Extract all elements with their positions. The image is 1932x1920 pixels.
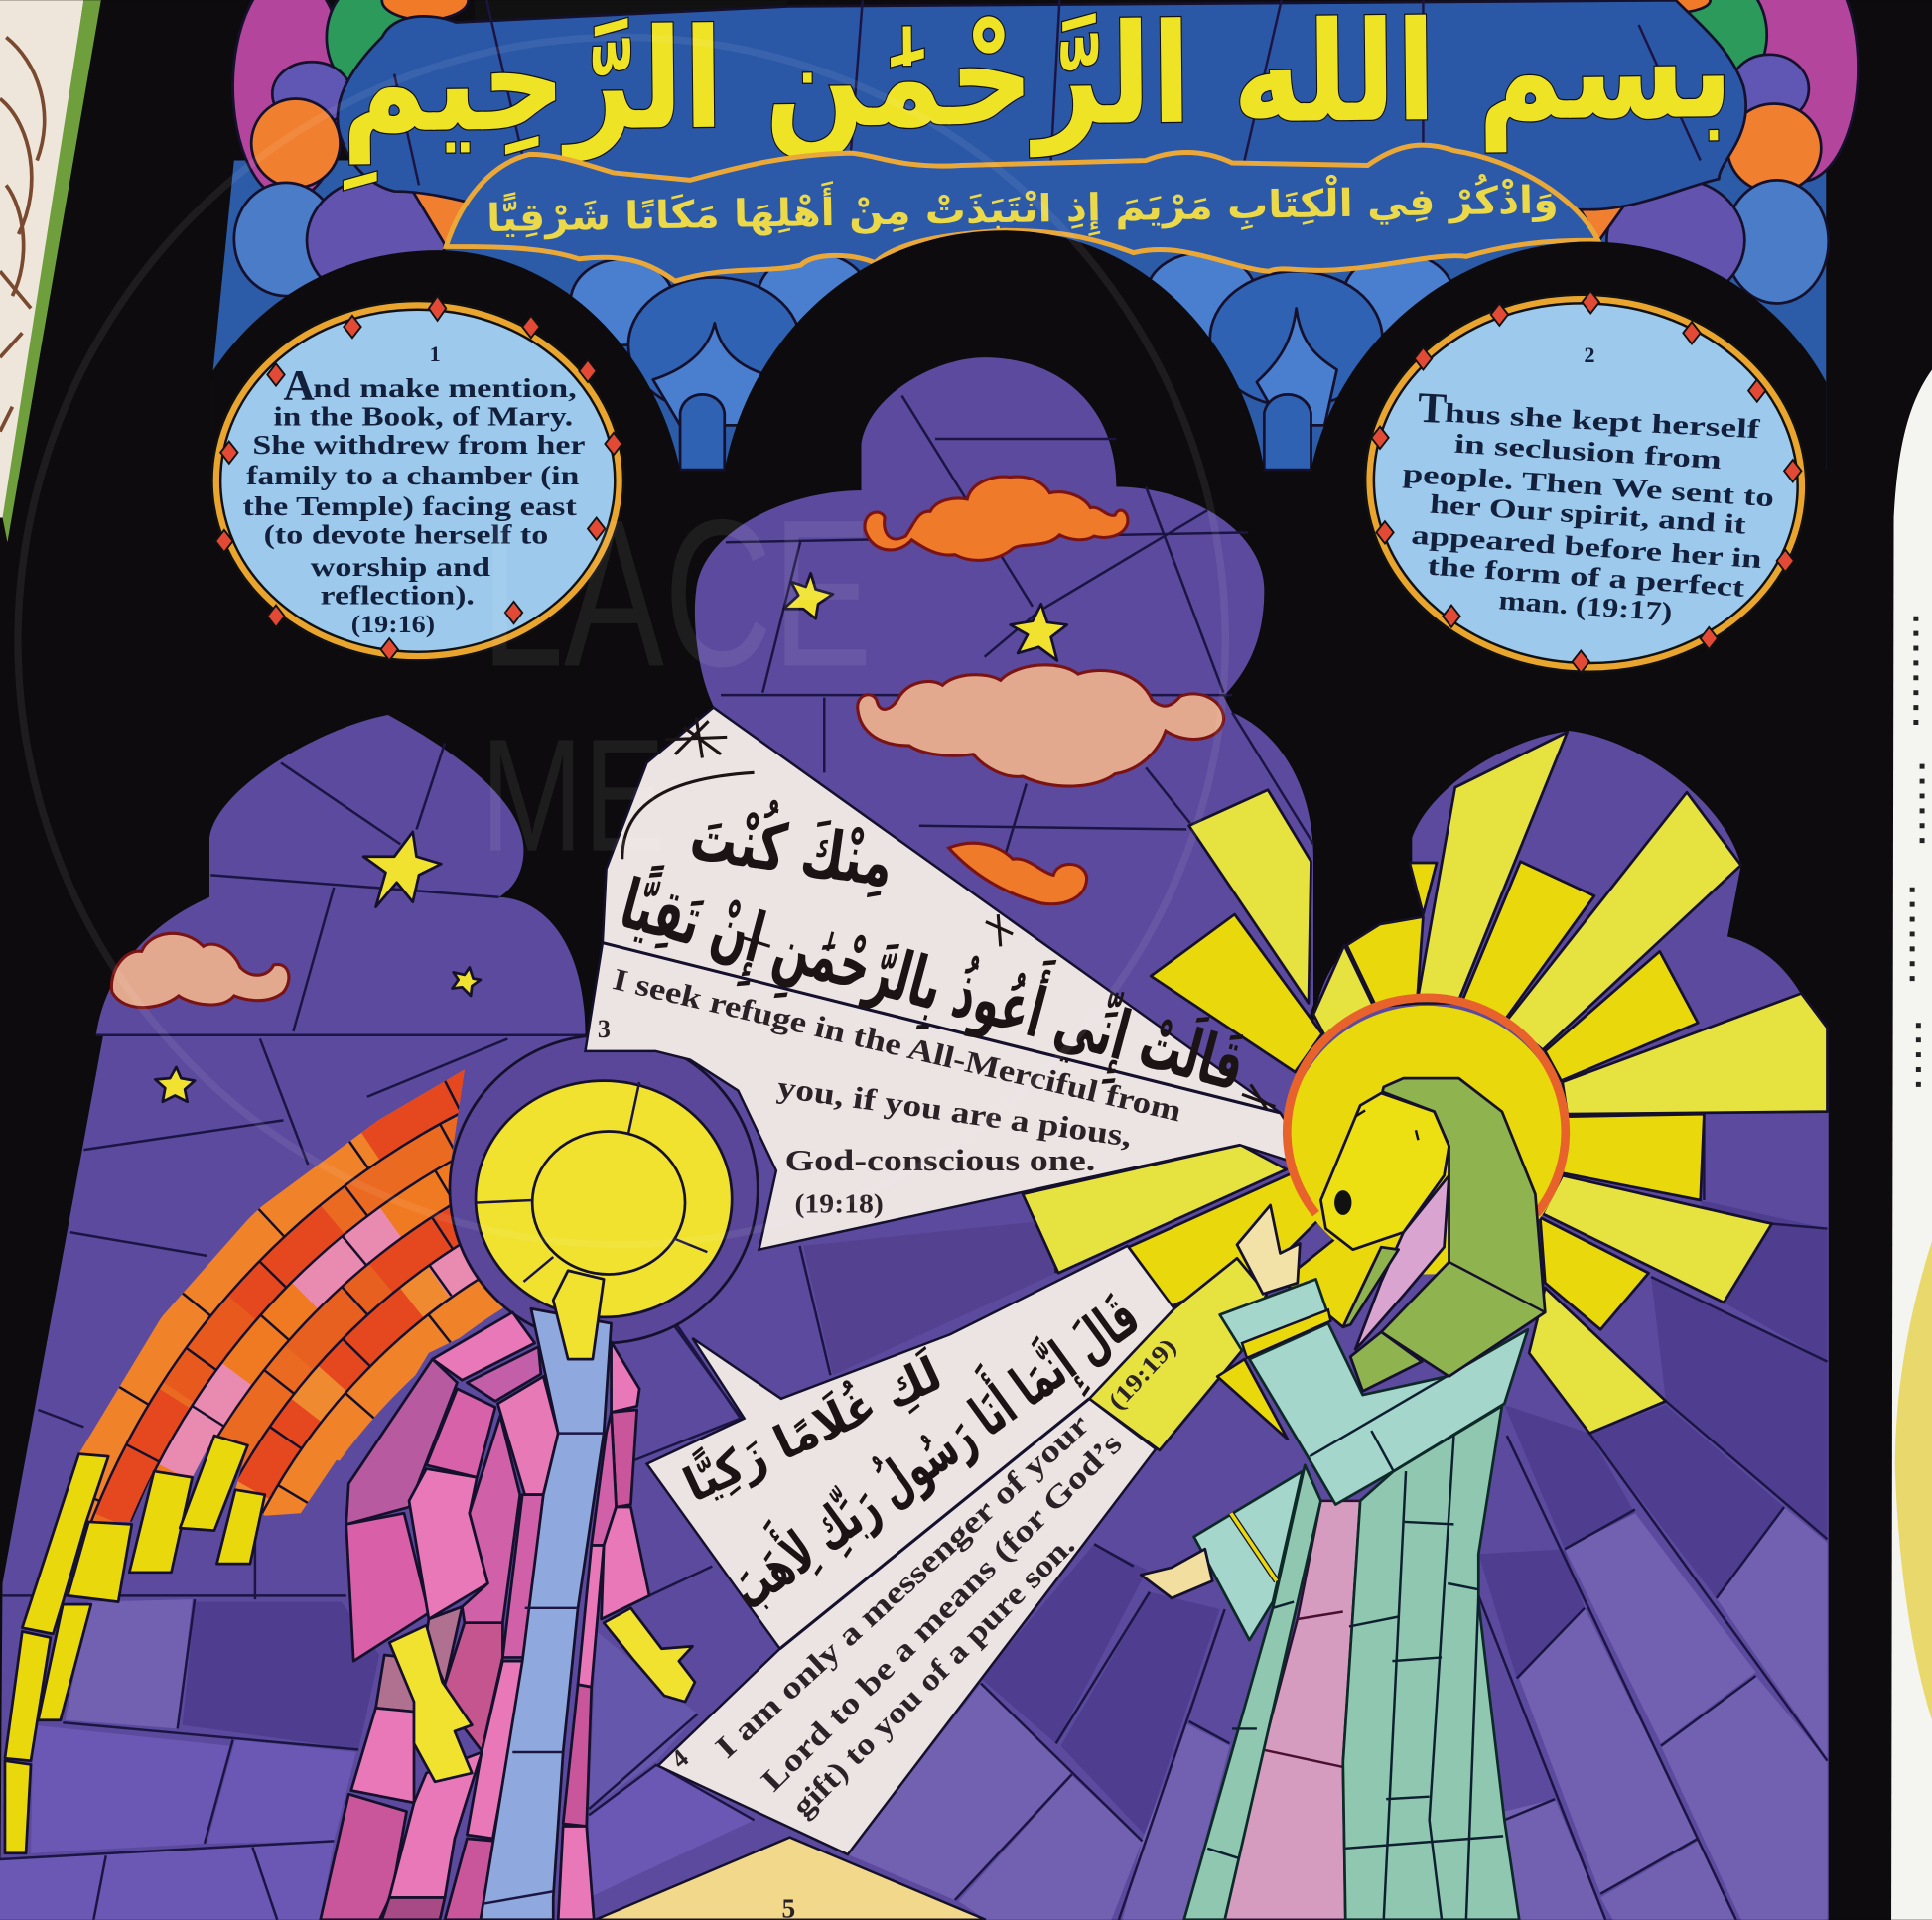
icon: orange cloud top <box>865 477 1128 560</box>
icon: halo <box>1287 998 1566 1274</box>
blue stained glass header <box>211 0 1859 470</box>
speech bubble: verse 4: gift) to you of a pure son. <box>785 1527 1081 1824</box>
speech bubble: verse 4: (19:19) <box>1104 1333 1182 1415</box>
panel: verse 1 medallion: family to a chamber (in <box>246 461 579 490</box>
panel: verse 1 medallion: (to devote herself to <box>264 520 548 550</box>
icon: face <box>1320 1093 1449 1250</box>
angel halo <box>476 1081 732 1359</box>
bubble 3 ornaments <box>622 718 1276 1109</box>
speech bubble: verse 3: 3 <box>598 1015 611 1043</box>
icon: star 5 <box>155 1067 195 1102</box>
icon: peach cloud centre <box>858 665 1224 786</box>
panel: verse 1 medallion: reflection). <box>321 580 475 610</box>
icon: star 1 <box>783 573 833 618</box>
panel: verse 2 medallion: 2 <box>1584 343 1595 367</box>
icon: raised hand <box>1237 1205 1300 1294</box>
panel: verse 1 medallion: nd make mention, <box>313 373 577 403</box>
speech bubble: verse 4 <box>647 1246 1182 1854</box>
robe <box>1184 1406 1519 1920</box>
right page edge <box>1891 370 1932 1920</box>
icon: peach cloud left <box>111 933 289 1008</box>
arabic calligraphy: قَالَتْ إِنِّي أَعُوذُ بِالرَّحْمَٰنِ إِنْ تَقِيًّا <box>610 847 1257 1120</box>
speech bubble: verse 4: لَكِ غُلَامًا زَكِيًّا <box>673 1342 950 1514</box>
panel: verse 1 medallion: in the Book, of Mary. <box>274 401 573 431</box>
panel: verse 2 medallion <box>1355 283 1816 683</box>
centre bottom cells <box>803 1220 1230 1920</box>
sleeve <box>1220 1279 1528 1505</box>
icon: orange cloud low <box>949 843 1087 904</box>
panel: verse 2 medallion: people. Then We sent to <box>1402 459 1775 512</box>
english verse: I seek refuge in the All-Merciful from <box>610 961 1185 1128</box>
left page edge <box>0 0 101 542</box>
icon: veil <box>1343 1078 1545 1391</box>
panel: verse 1 medallion: 1 <box>430 342 441 366</box>
panel: verse 1 medallion: worship and <box>311 552 490 582</box>
speech bubble: verse 3: مِنْكَ كُنْتَ <box>686 789 898 902</box>
panel: verse 2 medallion: her Our spirit, and it <box>1429 489 1746 540</box>
angel figure <box>321 1035 758 1920</box>
watermark: ME <box>481 707 665 886</box>
arabic calligraphy: قَالَ إِنَّمَا أَنَا رَسُولُ رَبِّكِ لِأَهَبَ <box>710 1272 1157 1631</box>
black arches <box>211 230 1826 470</box>
decorative clouds <box>865 477 1128 560</box>
panel: purple stained glass windows <box>0 357 1829 1920</box>
panel: verse 2 medallion: in seclusion from <box>1453 429 1723 475</box>
panel: verse 2 medallion: hus she kept herself <box>1444 398 1761 444</box>
throat <box>1355 1175 1449 1349</box>
mary figure <box>1141 998 1566 1920</box>
panel: verse 1 medallion: She withdrew from her <box>252 430 586 460</box>
english verse: I am only a messenger of your <box>708 1407 1096 1765</box>
panel: verse 1 medallion: (19:16) <box>351 612 435 638</box>
watermark: LACE <box>481 476 873 710</box>
icon: lower hand <box>1141 1549 1212 1598</box>
scalloped blue glass below banner <box>571 253 1453 470</box>
arabic verse banner: وَاذْكُرْ فِي الْكِتَابِ مَرْيَمَ إِذِ انْتَبَذَتْ مِنْ أَهْلِهَا مَكَانًا شَرْقِيًّا <box>486 168 1559 247</box>
angel wing <box>5 1057 608 1853</box>
panel: verse 2 medallion: man. (19:17) <box>1498 585 1673 626</box>
speech bubble: verse 3: God-conscious one. <box>785 1143 1095 1177</box>
speech bubble: verse 3 <box>586 708 1315 1250</box>
blue cloud behind bismillah <box>338 0 1746 209</box>
bottom panel: verse 5 <box>595 1838 986 1920</box>
left bottom cells <box>0 1599 755 1920</box>
watermark <box>18 37 1225 1245</box>
panel: verse 2 medallion: T <box>1417 384 1448 433</box>
panel: verse 2 medallion: the form of a perfect <box>1427 551 1745 603</box>
speech bubble: verse 4: 4 <box>665 1743 694 1774</box>
icon: star 3 <box>363 832 441 907</box>
sun rays <box>1023 732 1828 1450</box>
panel: verse 2 medallion: appeared before her in <box>1411 520 1763 574</box>
icon: star 4 <box>452 967 481 996</box>
panel: verse 1 medallion: the Temple) facing east <box>242 491 577 521</box>
icon: star 2 <box>1011 604 1067 660</box>
right bottom cells <box>1478 1200 1828 1920</box>
arabic verse banner <box>446 145 1598 281</box>
speech bubble: verse 3: you, if you are a pious, <box>775 1069 1134 1154</box>
speech bubble: verse 3: (19:18) <box>794 1188 884 1218</box>
speech bubble: verse 4: Lord to be a means (for God’s <box>755 1426 1129 1798</box>
panel: verse 1 medallion <box>211 296 623 660</box>
panel: verse 1 medallion: A <box>283 361 315 409</box>
